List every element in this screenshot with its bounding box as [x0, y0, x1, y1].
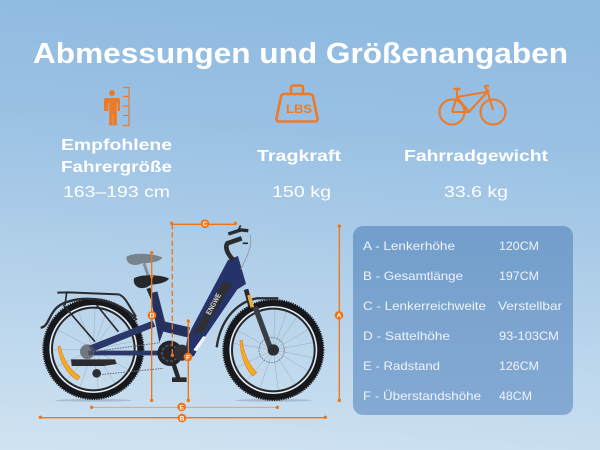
row F — [363, 389, 532, 403]
front fender — [217, 298, 278, 347]
spec: rider height — [61, 88, 172, 201]
row A: A - Lenkerhöhe — [363, 239, 455, 253]
row E — [363, 359, 539, 373]
row B: 197CM — [499, 269, 539, 283]
dimension badges: E — [179, 404, 184, 411]
dimension lines — [40, 224, 339, 418]
dimension badges: D — [150, 313, 155, 320]
icon: bicycle — [440, 86, 506, 124]
row F: F - Überstandshöhe — [363, 389, 481, 403]
drivetrain — [71, 341, 190, 382]
row B: B - Gesamtlänge — [363, 269, 463, 283]
dimension badges: A — [337, 313, 342, 320]
front fork — [246, 289, 272, 352]
icon: person with ruler — [104, 88, 129, 126]
icon: LBS weight: LBS — [286, 102, 312, 116]
row C: Verstellbar — [498, 299, 562, 313]
dimension badges: C — [203, 221, 208, 228]
rear fender and rack — [41, 292, 137, 342]
label: Tragkraft — [257, 148, 342, 165]
dimension badges: F — [186, 354, 190, 361]
panel: dimensions table — [353, 226, 573, 415]
label: Empfohlene — [61, 137, 172, 154]
value: 33.6 kg — [444, 184, 508, 201]
bike diagram — [39, 219, 343, 422]
row F: 48CM — [499, 389, 532, 403]
spec: rider height: Fahrergröße — [61, 159, 172, 176]
row B — [363, 269, 539, 283]
label: Fahrradgewicht — [404, 148, 549, 165]
row A: 120CM — [499, 239, 539, 253]
front reflector — [240, 340, 257, 376]
row C — [363, 299, 562, 313]
row D — [363, 329, 559, 343]
row E: 126CM — [499, 359, 539, 373]
row D: D - Sattelhöhe — [363, 329, 450, 343]
front wheel — [223, 300, 324, 400]
value: 150 kg — [272, 184, 331, 201]
frame: ENGWE — [204, 291, 223, 316]
handlebar — [226, 225, 251, 269]
seat post and saddles — [127, 254, 169, 298]
dimension badges: B — [180, 415, 185, 422]
spec: load capacity — [257, 85, 342, 201]
value: 163–193 cm — [63, 184, 170, 201]
rear wheel — [43, 299, 144, 399]
row E: E - Radstand — [363, 359, 440, 373]
rear reflector — [58, 346, 80, 380]
row C: C - Lenkerreichweite — [363, 299, 486, 313]
title: Abmessungen und Größenangaben — [33, 38, 568, 70]
dimension badges — [148, 219, 343, 422]
frame — [88, 256, 246, 359]
wheel shadows — [55, 399, 312, 402]
dimension end dots — [39, 222, 341, 419]
row A — [363, 239, 539, 253]
row D: 93-103CM — [499, 329, 559, 343]
spec: bike weight — [404, 86, 549, 201]
